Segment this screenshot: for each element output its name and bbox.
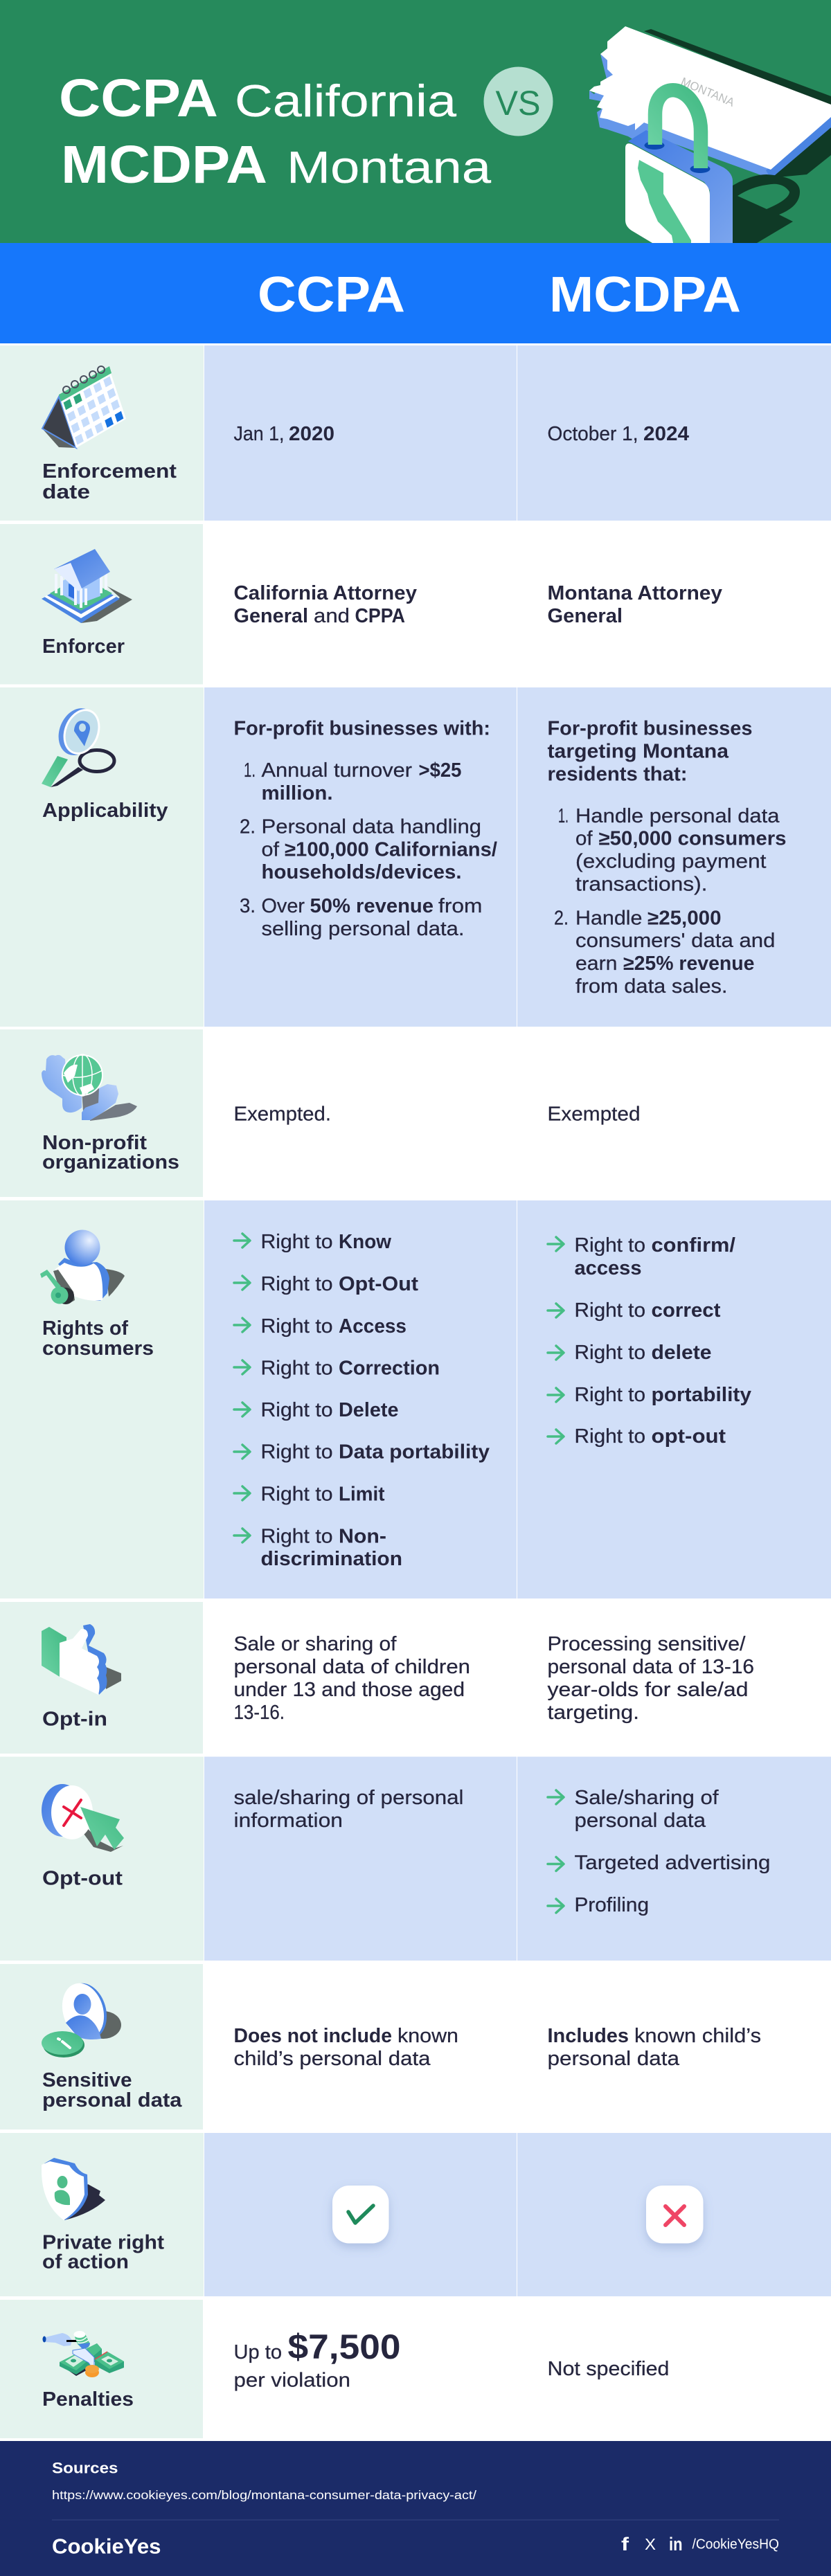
social handles: in	[669, 2534, 683, 2555]
MCDPA value: opt-out list	[548, 1787, 770, 1916]
CCPA value: applicability list	[234, 717, 497, 940]
icon: person with key	[40, 1230, 125, 1304]
title: Montana	[287, 142, 492, 192]
CCPA value: rights list: Data portability	[339, 1441, 490, 1463]
CCPA value	[234, 582, 417, 627]
MCDPA value: opt-out list: Sale/sharing of	[575, 1787, 719, 1809]
CCPA value: under 13 and those aged	[234, 1679, 465, 1701]
MCDPA value: General	[547, 605, 623, 627]
CCPA value: child’s personal data	[234, 2048, 431, 2070]
CCPA value: rights list: Access	[339, 1315, 406, 1337]
CCPA value: General	[234, 605, 308, 627]
CCPA value: rights list: Right to	[260, 1441, 332, 1463]
state label: MONTANA	[679, 75, 737, 109]
CCPA value: per violation	[234, 2369, 350, 2391]
CCPA value: rights list: Opt-Out	[339, 1273, 419, 1295]
CCPA value: Does not include	[234, 2025, 392, 2047]
row: non-profit organizations	[0, 1029, 640, 1197]
label: of action	[42, 2251, 129, 2273]
label: Opt-out	[42, 1868, 123, 1890]
icon: gavel and money	[43, 2331, 124, 2377]
CCPA value: rights list: Non-	[339, 1526, 386, 1548]
icon: government building	[42, 549, 132, 623]
social handles: f	[621, 2534, 629, 2555]
row: rights of consumers	[0, 1200, 831, 1598]
title: California	[235, 75, 457, 126]
MCDPA value: personal data of 13-16	[547, 1656, 754, 1678]
CCPA value: rights list: Right to	[260, 1483, 332, 1505]
CCPA value: applicability list: selling personal data.	[262, 918, 464, 940]
icon: hands holding globe	[42, 1054, 137, 1121]
MCDPA value: rights list: Right to	[575, 1425, 645, 1448]
padlock body	[628, 130, 733, 243]
CCPA value: applicability list: 50% revenue	[310, 895, 434, 917]
CCPA value	[234, 2327, 400, 2391]
CCPA value: rights list: Correction	[339, 1357, 440, 1379]
label	[42, 2069, 182, 2111]
MCDPA value: rights list: confirm/	[651, 1234, 735, 1257]
MCDPA value	[547, 1633, 754, 1724]
CCPA value	[234, 1787, 464, 1832]
CCPA value: rights list: Delete	[339, 1399, 399, 1421]
CCPA value: Jan 1,	[234, 423, 284, 445]
yes card: check mark	[332, 2186, 389, 2243]
MCDPA value: applicability list: ≥50,000 consumers	[598, 828, 787, 850]
VS badge: VS	[496, 84, 540, 123]
MCDPA value: applicability list: consumers' data and	[575, 930, 776, 952]
label: Rights of	[42, 1317, 128, 1340]
CCPA value: rights list: Limit	[339, 1483, 385, 1505]
MCDPA value: targeting.	[547, 1702, 639, 1724]
MCDPA value	[547, 582, 722, 627]
row: sensitive personal data	[0, 1964, 761, 2129]
MCDPA value: applicability list: Handle personal data	[575, 805, 780, 827]
CCPA value: rights list: Right to	[260, 1273, 332, 1295]
MCDPA value: applicability list: (excluding payment	[575, 850, 767, 872]
CCPA value: rights list: Right to	[260, 1315, 332, 1337]
California shape on padlock	[638, 160, 691, 243]
label: Non-profit	[42, 1132, 147, 1154]
CCPA value	[234, 2025, 458, 2070]
MCDPA value: known child’s	[634, 2025, 761, 2047]
CCPA value: sale/sharing of personal	[234, 1787, 464, 1809]
label	[42, 2232, 164, 2273]
icon: magnifier with location pin	[42, 703, 114, 787]
social handles: /CookieYesHQ	[692, 2537, 779, 2552]
label: Sensitive	[42, 2069, 132, 2091]
lock shadow	[733, 174, 800, 243]
MCDPA value: applicability list: from data sales.	[575, 975, 727, 998]
MCDPA value: applicability list: 2.	[554, 907, 569, 929]
label: Applicability	[42, 800, 168, 822]
row: opt-out	[0, 1757, 831, 1961]
MCDPA value	[547, 2025, 761, 2070]
CCPA value: applicability list: ≥100,000 Californians/	[285, 839, 497, 861]
row: opt-in	[0, 1602, 754, 1754]
icon: calendar	[42, 366, 126, 448]
CCPA value: applicability list: from	[438, 895, 482, 917]
illustration: Montana map with California padlock	[589, 26, 831, 243]
CCPA value: CPPA	[355, 605, 405, 627]
panel: footer	[0, 2441, 831, 2576]
column heading MCDPA: MCDPA	[549, 267, 741, 323]
CCPA value: personal data of children	[234, 1656, 470, 1678]
CCPA value: applicability list: households/devices.	[262, 861, 461, 883]
brand logo: CookieYes	[52, 2534, 161, 2559]
label: Private right	[42, 2232, 164, 2254]
CCPA value: rights list: Right to	[260, 1399, 332, 1421]
row: applicability	[0, 687, 831, 1027]
VS badge	[483, 66, 553, 136]
MCDPA value: applicability list: earn	[575, 953, 618, 975]
CCPA value: applicability list: Over	[262, 895, 305, 917]
CCPA value: information	[234, 1810, 343, 1832]
CCPA value	[234, 423, 334, 445]
MCDPA value: October 1,	[547, 423, 638, 445]
no card: cross mark	[646, 2186, 704, 2243]
CCPA value	[234, 1633, 470, 1724]
MCDPA value: applicability list: ≥25% revenue	[623, 953, 755, 975]
MCDPA value: year-olds for sale/ad	[547, 1679, 748, 1701]
MCDPA value: rights list: opt-out	[651, 1425, 726, 1448]
MCDPA value: rights list: correct	[651, 1299, 721, 1322]
CCPA value: rights list: Right to	[260, 1231, 332, 1253]
row: private right of action	[0, 2133, 831, 2296]
CCPA value: applicability list: Personal data handling	[262, 816, 481, 838]
icon: profile disc with info badge	[42, 1979, 121, 2057]
MCDPA value: rights list: portability	[651, 1384, 751, 1406]
label: Enforcer	[42, 636, 125, 658]
label: Opt-in	[42, 1709, 107, 1731]
panel: green title banner	[0, 0, 831, 243]
social handles	[621, 2534, 779, 2555]
MCDPA value: 2024	[643, 423, 689, 445]
label	[42, 1317, 154, 1360]
MCDPA value: opt-out list: Targeted advertising	[575, 1852, 770, 1874]
MCDPA value: rights list: Right to	[575, 1384, 645, 1406]
row: enforcement date	[0, 345, 831, 521]
label: consumers	[42, 1337, 154, 1360]
title: CCPA	[59, 69, 218, 128]
row: enforcer	[0, 524, 722, 684]
social handles: X	[645, 2535, 656, 2553]
MCDPA value: Exempted	[547, 1104, 640, 1126]
CCPA value: rights list	[234, 1231, 490, 1570]
MCDPA value: rights list: Right to	[575, 1299, 645, 1322]
column heading CCPA: CCPA	[258, 267, 405, 323]
CCPA value: applicability list: million.	[262, 782, 332, 804]
CCPA value: applicability list: 3.	[240, 895, 256, 917]
label: Enforcement	[42, 460, 177, 483]
CCPA value: $7,500	[288, 2327, 400, 2366]
MCDPA value: rights list	[548, 1234, 751, 1448]
MCDPA value: Not specified	[547, 2358, 669, 2380]
MCDPA value: rights list: delete	[651, 1342, 712, 1364]
CCPA value: Exempted.	[234, 1104, 331, 1126]
label: Penalties	[42, 2388, 134, 2411]
CCPA value: applicability list: >$25	[418, 759, 462, 782]
sources URL: https://www.cookieyes.com/blog/montana-consumer-data-privacy-act/	[52, 2488, 476, 2502]
icon: cursor clicking opt-out button	[42, 1784, 124, 1852]
MCDPA value: Includes	[547, 2025, 629, 2047]
CCPA value: known	[397, 2025, 458, 2047]
MCDPA value: applicability list	[547, 717, 787, 998]
icon: shield with person	[42, 2158, 105, 2220]
MCDPA value: Processing sensitive/	[547, 1633, 746, 1655]
MCDPA value: applicability list: For-profit businesses	[547, 717, 752, 739]
shackle	[644, 141, 665, 150]
MCDPA value: opt-out list: personal data	[575, 1810, 706, 1832]
CCPA value: applicability list: of	[262, 839, 279, 861]
CCPA value: applicability list: For-profit businesses with:	[234, 717, 490, 739]
MCDPA value: applicability list: transactions).	[575, 874, 708, 896]
row: penalties	[0, 2300, 669, 2438]
CCPA value: 13-16.	[234, 1702, 285, 1724]
CCPA value: California Attorney	[234, 582, 417, 604]
MCDPA value: Montana Attorney	[547, 582, 722, 604]
MCDPA value: rights list: Right to	[575, 1342, 645, 1364]
CCPA value: 2020	[289, 423, 334, 445]
label: personal data	[42, 2089, 182, 2111]
MCDPA value: rights list: access	[575, 1257, 641, 1279]
CCPA value: and	[314, 605, 350, 627]
title: MCDPA	[61, 135, 267, 195]
MCDPA value: applicability list: residents that:	[547, 763, 687, 785]
MCDPA value	[547, 423, 689, 445]
CCPA value: rights list: Right to	[260, 1526, 332, 1548]
MCDPA value: applicability list: ≥25,000	[647, 907, 722, 929]
MCDPA value: applicability list: Handle	[575, 907, 643, 929]
CCPA value: Sale or sharing of	[234, 1633, 397, 1655]
label: date	[42, 481, 90, 503]
label	[42, 1132, 179, 1173]
MCDPA value: personal data	[547, 2048, 679, 2070]
CCPA value: rights list: Know	[339, 1231, 392, 1253]
MCDPA value: rights list: Right to	[575, 1234, 645, 1257]
title	[59, 69, 492, 195]
CCPA value: applicability list: Annual turnover	[262, 759, 413, 782]
label	[42, 460, 177, 503]
MCDPA value: applicability list: 1.	[558, 805, 569, 827]
CCPA value: rights list: discrimination	[260, 1548, 402, 1570]
CCPA value: applicability list: 1.	[244, 759, 256, 782]
sources heading: Sources	[52, 2459, 118, 2477]
CCPA value: Up to	[234, 2341, 282, 2363]
CCPA value: applicability list: 2.	[240, 816, 256, 838]
label: organizations	[42, 1151, 179, 1173]
icon: thumbs up	[42, 1624, 121, 1695]
MCDPA value: opt-out list: Profiling	[575, 1894, 649, 1916]
MCDPA value: applicability list: targeting Montana	[547, 741, 729, 763]
CCPA value: rights list: Right to	[260, 1357, 332, 1379]
MCDPA value: applicability list: of	[575, 828, 593, 850]
panel: blue column header bar	[0, 243, 831, 343]
